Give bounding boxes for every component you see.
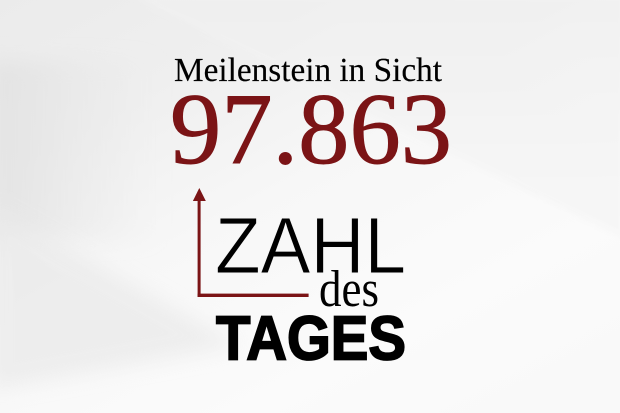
word: ZAHL: ZAHL: [215, 201, 406, 290]
word: TAGES: TAGES: [216, 304, 406, 374]
icon: upward arrow with corner line: [193, 188, 309, 297]
word: des: des: [319, 261, 379, 318]
big number: 97.863: 97.863: [170, 73, 452, 186]
heading: Meilenstein in Sicht: Meilenstein in Sicht: [174, 52, 443, 89]
logo: ZAHL des TAGES: [215, 201, 406, 374]
